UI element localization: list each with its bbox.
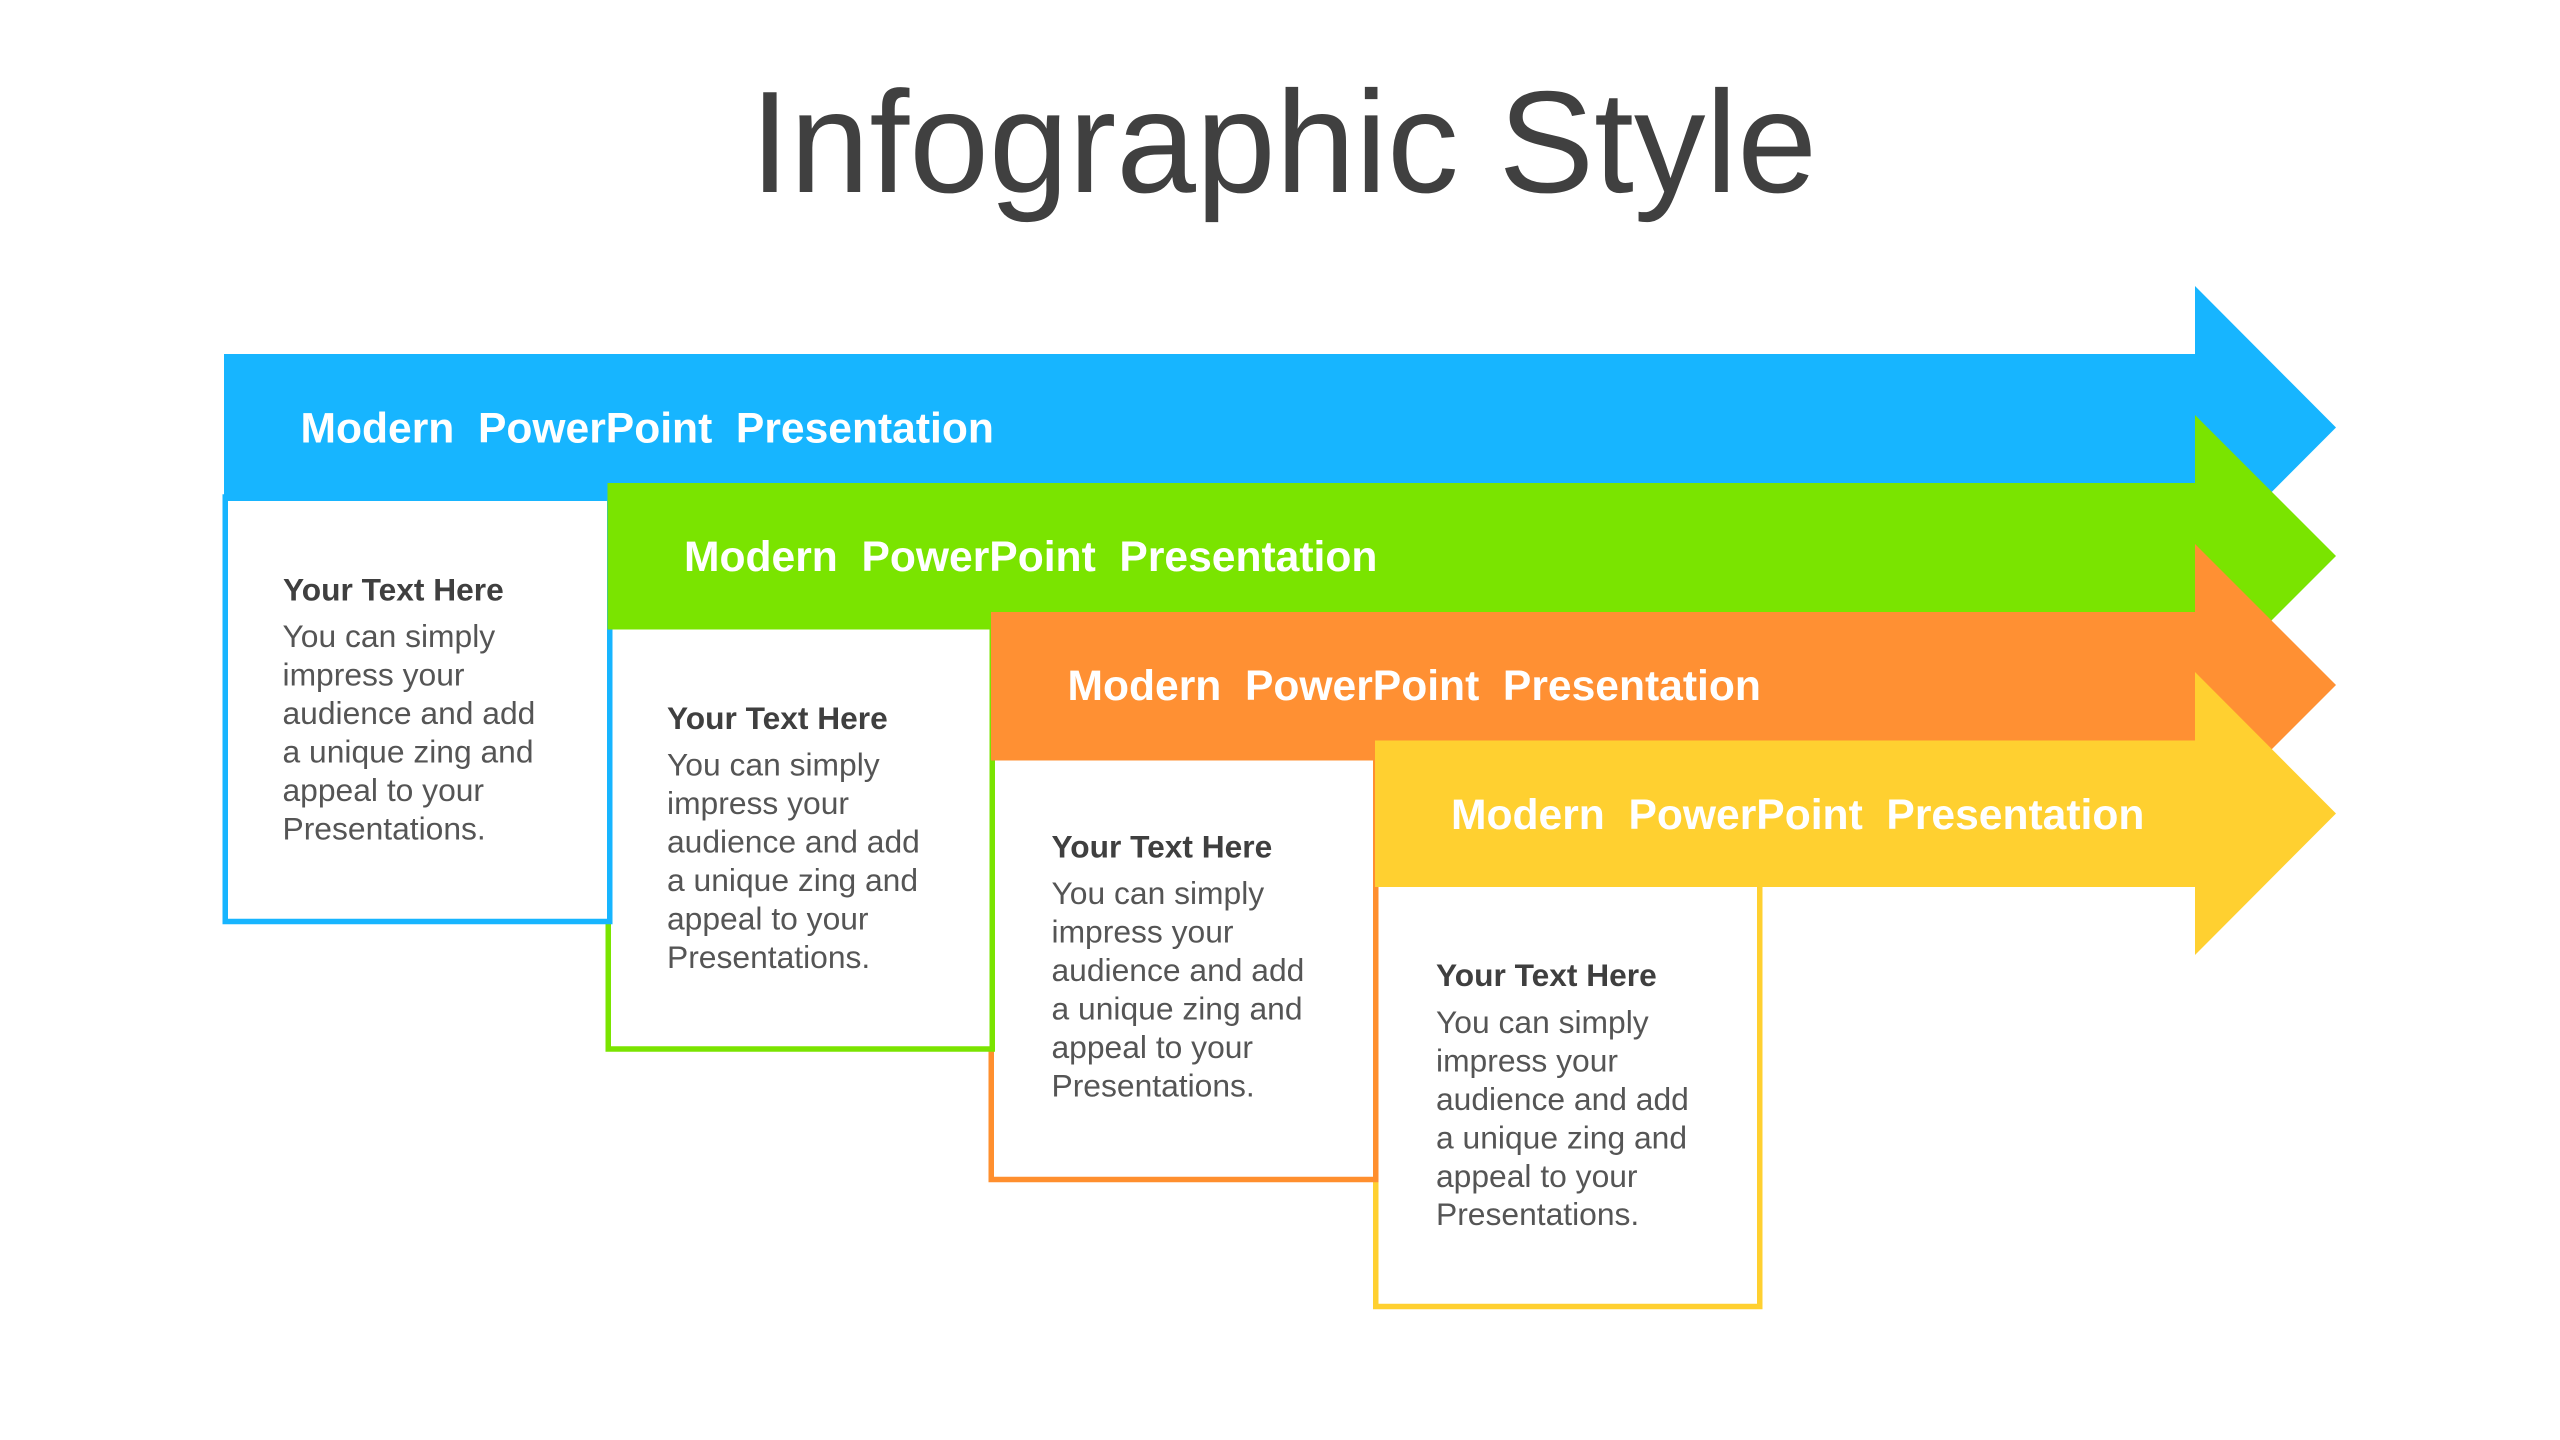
card 4 heading: Your Text Here bbox=[1436, 957, 1657, 993]
card 1 body: You can simply bbox=[282, 618, 495, 654]
card 4 body: audience and add bbox=[1436, 1081, 1689, 1117]
card 3 heading: Your Text Here bbox=[1052, 828, 1272, 864]
card 2 body: audience and add bbox=[667, 824, 920, 860]
card 4 body: appeal to your bbox=[1436, 1158, 1638, 1194]
card 2 body: a unique zing and bbox=[667, 862, 918, 898]
card 3 body: audience and add bbox=[1052, 952, 1304, 988]
card 3 body: impress your bbox=[1052, 914, 1234, 950]
card 1 body: a unique zing and bbox=[282, 734, 534, 770]
card 1 body: Presentations. bbox=[282, 810, 486, 846]
card 1 body: appeal to your bbox=[282, 772, 484, 808]
card 4 body: You can simply bbox=[1436, 1004, 1649, 1040]
panel: card 3 (orange) bbox=[991, 750, 1376, 1180]
panel: card 4 (yellow) bbox=[1376, 880, 1760, 1306]
card 3 body: Presentations. bbox=[1052, 1068, 1255, 1104]
card 2 heading: Your Text Here bbox=[667, 700, 888, 736]
arrow 2 (green) bbox=[608, 415, 2336, 697]
arrow 1 label: Modern PowerPoint Presentation bbox=[300, 404, 994, 452]
arrow 4 label: Modern PowerPoint Presentation bbox=[1451, 791, 2144, 839]
panel: card 2 (green) bbox=[608, 620, 992, 1049]
card 2 body: impress your bbox=[667, 785, 849, 821]
card 3 body: You can simply bbox=[1052, 875, 1264, 911]
arrow 2 label: Modern PowerPoint Presentation bbox=[684, 533, 1377, 581]
card 2 body: Presentations. bbox=[667, 939, 870, 975]
title: Infographic Style bbox=[750, 61, 1817, 223]
panel: card 1 (blue) bbox=[225, 497, 610, 922]
card 1 heading: Your Text Here bbox=[283, 572, 504, 608]
card 1 body: impress your bbox=[282, 656, 465, 692]
card 3 body: appeal to your bbox=[1052, 1029, 1253, 1065]
card 4 body: a unique zing and bbox=[1436, 1120, 1687, 1156]
arrow 3 label: Modern PowerPoint Presentation bbox=[1068, 662, 1761, 710]
card 2 body: appeal to your bbox=[667, 900, 869, 936]
card 1 body: audience and add bbox=[282, 695, 535, 731]
card 4 body: impress your bbox=[1436, 1042, 1618, 1078]
card 3 body: a unique zing and bbox=[1052, 990, 1303, 1026]
arrow 4 (yellow) bbox=[1375, 672, 2336, 955]
card 2 body: You can simply bbox=[667, 746, 880, 782]
arrow 3 (orange) bbox=[991, 544, 2336, 826]
card 4 body: Presentations. bbox=[1436, 1196, 1639, 1232]
arrow 1 (blue) bbox=[224, 286, 2336, 569]
